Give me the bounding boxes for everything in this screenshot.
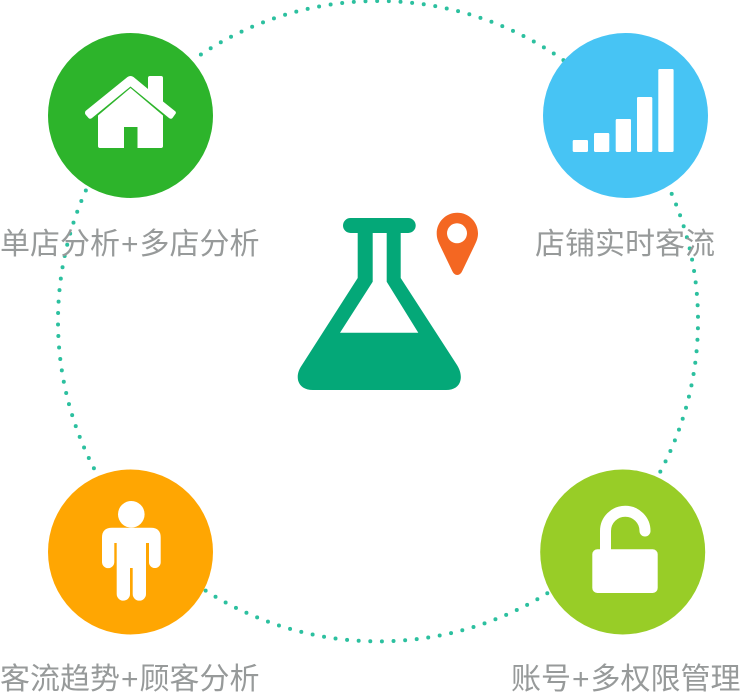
icon: house <box>85 76 176 148</box>
centre icon: flask <box>298 218 461 390</box>
panel: real-time store traffic <box>535 33 715 261</box>
orange circle <box>48 470 213 634</box>
green circle <box>48 33 213 198</box>
label: 店铺实时客流 <box>535 228 715 261</box>
panel: accounts and permission management <box>511 470 740 694</box>
icon: person <box>102 501 161 601</box>
panel: traffic trends and customer analysis <box>0 470 260 694</box>
label: 单店分析+多店分析 <box>0 228 260 261</box>
flask lip <box>343 218 416 233</box>
dotted ring <box>58 1 698 641</box>
icon: bar chart <box>573 69 674 152</box>
lime circle <box>540 470 705 634</box>
blue circle <box>543 33 708 198</box>
flask body <box>298 230 461 390</box>
icon: open padlock <box>592 511 658 593</box>
icon: orange map pin <box>437 213 478 275</box>
panel: single and multi store analysis <box>0 33 260 261</box>
